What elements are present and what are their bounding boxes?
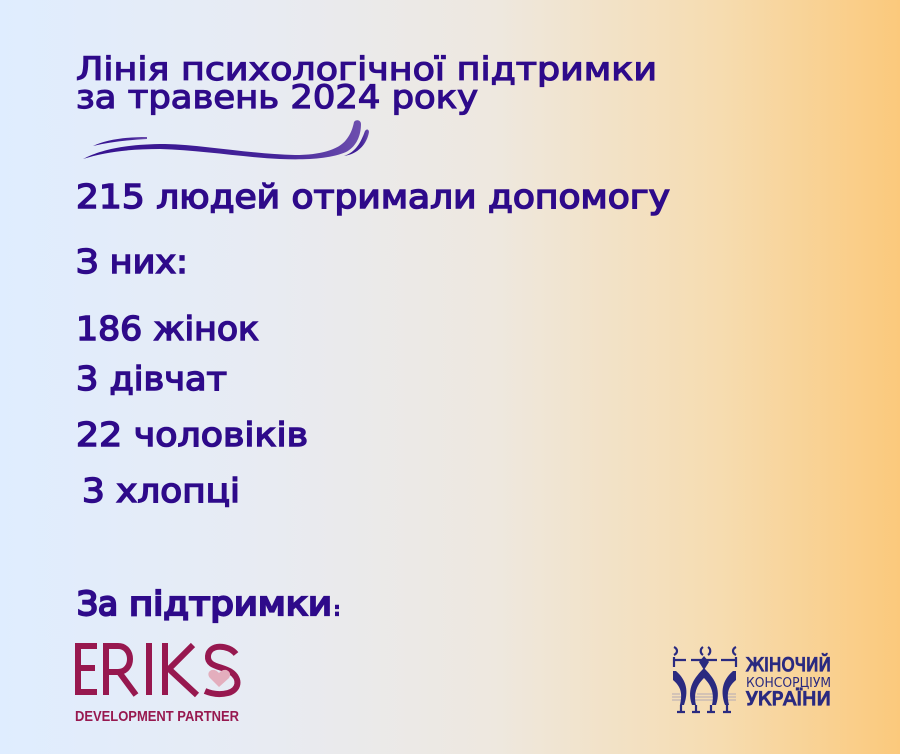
stat: girls: 3 дівчат bbox=[76, 359, 227, 398]
total helped: 215 людей отримали допомогу bbox=[76, 177, 670, 216]
supported by heading bbox=[77, 584, 340, 623]
title bbox=[76, 50, 657, 116]
icon: three figures bbox=[672, 647, 736, 712]
title: за травень 2024 року bbox=[76, 78, 478, 116]
stat: men: 22 чоловіків bbox=[76, 415, 308, 454]
logo: ERIKS Development Partner: DEVELOPMENT PARTNER bbox=[75, 708, 239, 725]
logo: Women's Consortium of Ukraine bbox=[672, 647, 831, 712]
supported by heading: За bbox=[77, 584, 118, 623]
logo: ERIKS Development Partner bbox=[75, 643, 239, 725]
logo: Women's Consortium of Ukraine: КОНСОРЦІУМ bbox=[746, 676, 831, 691]
title: Лінія психологічної підтримки bbox=[76, 50, 657, 88]
supported by heading: підтримки bbox=[129, 584, 332, 623]
stat: women: 186 жінок bbox=[76, 309, 259, 348]
stat: boys: 3 хлопці bbox=[82, 471, 240, 510]
subheading: of them: З них: bbox=[76, 242, 188, 281]
logo: Women's Consortium of Ukraine: ЖІНОЧИЙ bbox=[746, 653, 831, 676]
icon: heart bbox=[208, 670, 230, 687]
logo: Women's Consortium of Ukraine: УКРАЇНИ bbox=[746, 687, 831, 710]
supported by heading: : bbox=[334, 599, 340, 620]
decorative brush underline bbox=[83, 120, 369, 159]
